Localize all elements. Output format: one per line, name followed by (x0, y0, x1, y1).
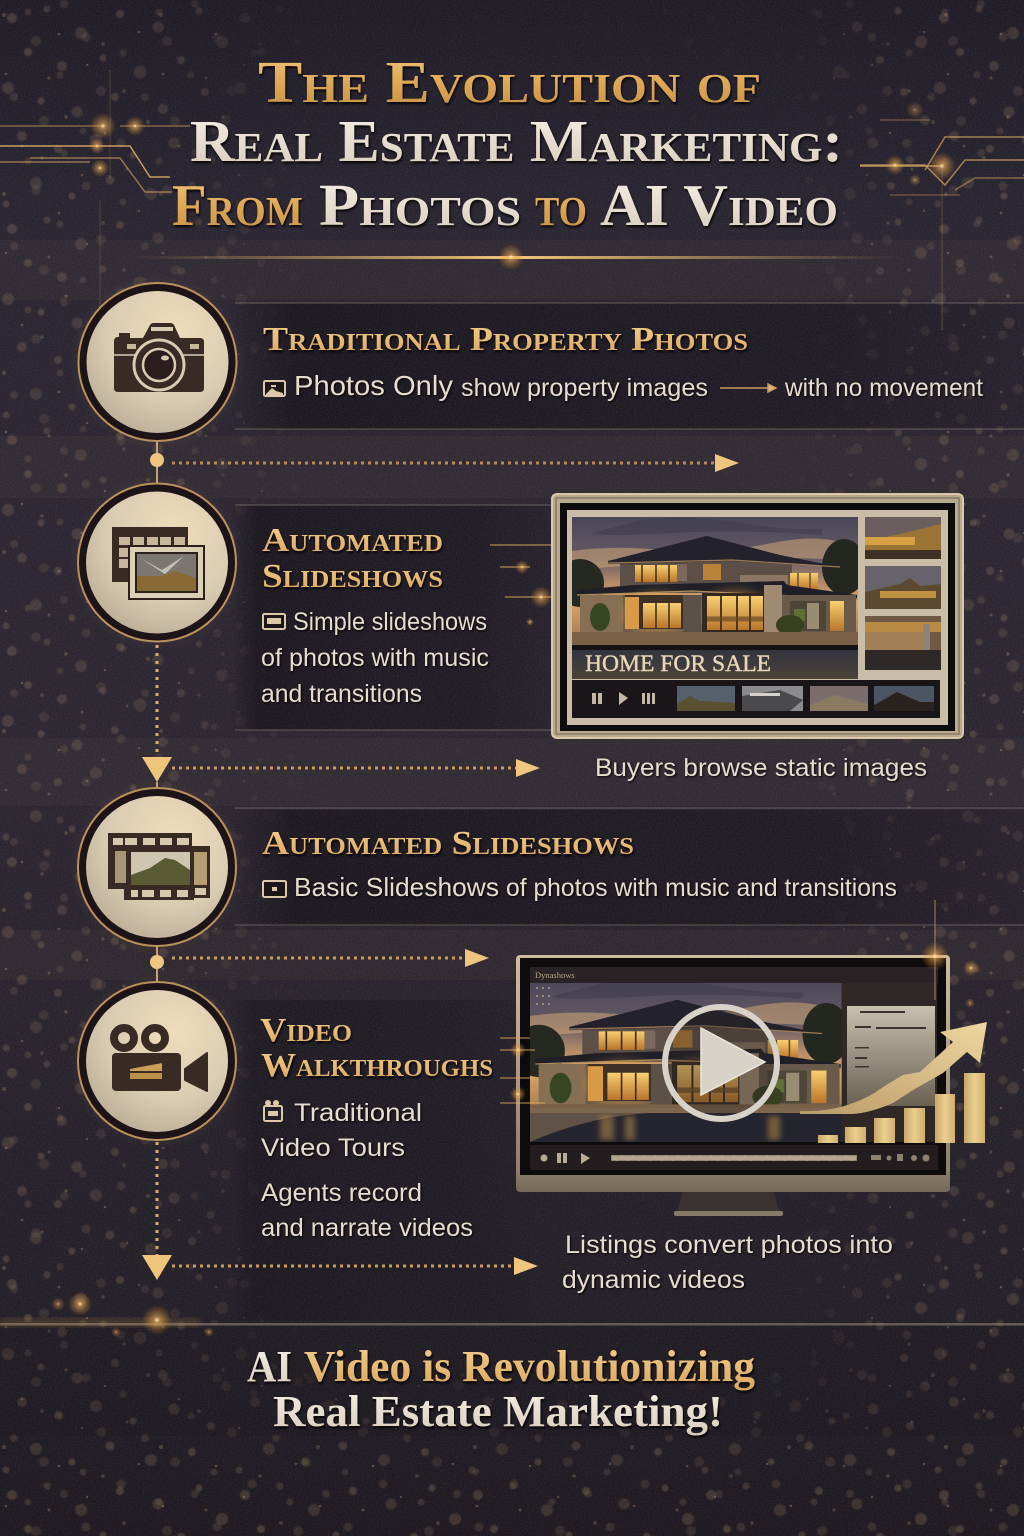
step heading: automated slideshows: Automated (262, 522, 443, 559)
circuit decoration: top left (0, 70, 190, 320)
step text: traditional video tours: Agents record (261, 1179, 422, 1207)
icon: small slide (263, 614, 285, 629)
step text: basic slideshows: of photos with music and transitions (506, 874, 897, 902)
step text: photos only: with no movement (784, 374, 983, 402)
step text: photos only (264, 370, 983, 402)
side thumbnails (865, 517, 941, 670)
step heading: video walkthroughs (260, 1012, 493, 1084)
text: home for sale: HOME FOR SALE (585, 651, 771, 676)
step heading: traditional property photos: Traditional Property Photos (263, 321, 748, 358)
caption: buyers browse static images: Buyers browse static images (595, 754, 927, 782)
step heading: video walkthroughs: Walkthroughs (261, 1047, 493, 1084)
monitor stand (677, 1191, 780, 1212)
dotted arrow: row 4 (172, 1257, 538, 1275)
step text: simple slideshows: and transitions (261, 680, 422, 708)
step text: photos only: Photos Only (294, 370, 453, 401)
dotted arrow: row 2 (172, 759, 540, 777)
step heading: automated slideshows (262, 522, 443, 595)
player controls (592, 692, 655, 705)
step heading: automated slideshows: Slideshows (262, 558, 443, 595)
caption: listings convert photos: Listings convert photos into (565, 1231, 893, 1259)
icon: small slide (263, 881, 286, 897)
step text: traditional video tours: Traditional (294, 1099, 422, 1127)
step text: simple slideshows: of photos with music (261, 644, 489, 672)
title: Real Estate Marketing: (190, 108, 843, 174)
arrow (720, 384, 776, 392)
video camera glyph (112, 1028, 207, 1091)
growth bars (818, 1073, 985, 1143)
footer message (247, 1342, 755, 1436)
video frame (530, 983, 842, 1142)
film strip glyph (108, 833, 210, 900)
slideshow glyph (112, 527, 204, 599)
sparkle around monitor (500, 900, 979, 1103)
side panel (842, 983, 937, 1142)
step text: basic slideshows: Basic Slideshows (294, 872, 499, 902)
timeline connector: step 2 to 3 (142, 645, 172, 790)
caption: listings convert photos: dynamic videos (562, 1266, 745, 1294)
footer divider (0, 1292, 1024, 1337)
step text: traditional video tours: Video Tours (261, 1134, 405, 1162)
caption: listings convert photos (562, 1231, 893, 1294)
title: From (172, 172, 303, 238)
monitor (513, 955, 950, 1216)
title: AI Video (600, 172, 838, 238)
step text: traditional video tours: and narrate videos (261, 1214, 473, 1242)
camera glyph (114, 323, 204, 392)
title divider (130, 244, 900, 270)
title: The Evolution of (258, 49, 761, 115)
step icon: film strip (69, 779, 245, 955)
step icon: camera (70, 274, 246, 450)
step text: basic slideshows (263, 872, 897, 902)
monitor: Dynashows (535, 970, 575, 980)
circuit decoration: top right (860, 101, 1024, 330)
footer message: Real Estate Marketing! (273, 1387, 723, 1436)
glow connectors into slideshow frame (490, 545, 552, 626)
timeline connector: step 1 to 2 (150, 441, 164, 484)
step text: simple slideshows: Simple slideshows (293, 608, 487, 636)
dotted arrow: row 1 (172, 454, 739, 472)
play button (665, 1007, 777, 1119)
step heading: video walkthroughs: Video (260, 1012, 352, 1049)
filmstrip thumbnails (677, 686, 934, 711)
step heading: automated slideshows second: Automated Slideshows (262, 825, 634, 862)
progress segments (611, 1155, 857, 1161)
icon: small photo (264, 381, 285, 396)
dotted arrow: row 3 (172, 949, 489, 967)
step text: photos only: show property images (461, 374, 708, 402)
step icon: video camera (69, 973, 245, 1149)
timeline connector: step 4 to footer (142, 1142, 172, 1280)
main house photo (556, 517, 866, 679)
title (172, 49, 843, 238)
timeline connector: step 3 to 4 (150, 946, 164, 984)
step text: simple slideshows (261, 608, 489, 708)
step text: traditional video tours (261, 1099, 473, 1242)
growth arrow (800, 1022, 987, 1114)
title: to (535, 172, 587, 238)
control bar (530, 1145, 938, 1170)
footer message: Video is Revolutionizing (304, 1342, 755, 1391)
control bar (572, 680, 940, 718)
slideshow frame (552, 494, 963, 738)
step icon: slideshow (69, 474, 245, 650)
footer message: AI (247, 1342, 292, 1391)
title: Photos (319, 172, 521, 238)
icon: small video camera (264, 1100, 282, 1121)
